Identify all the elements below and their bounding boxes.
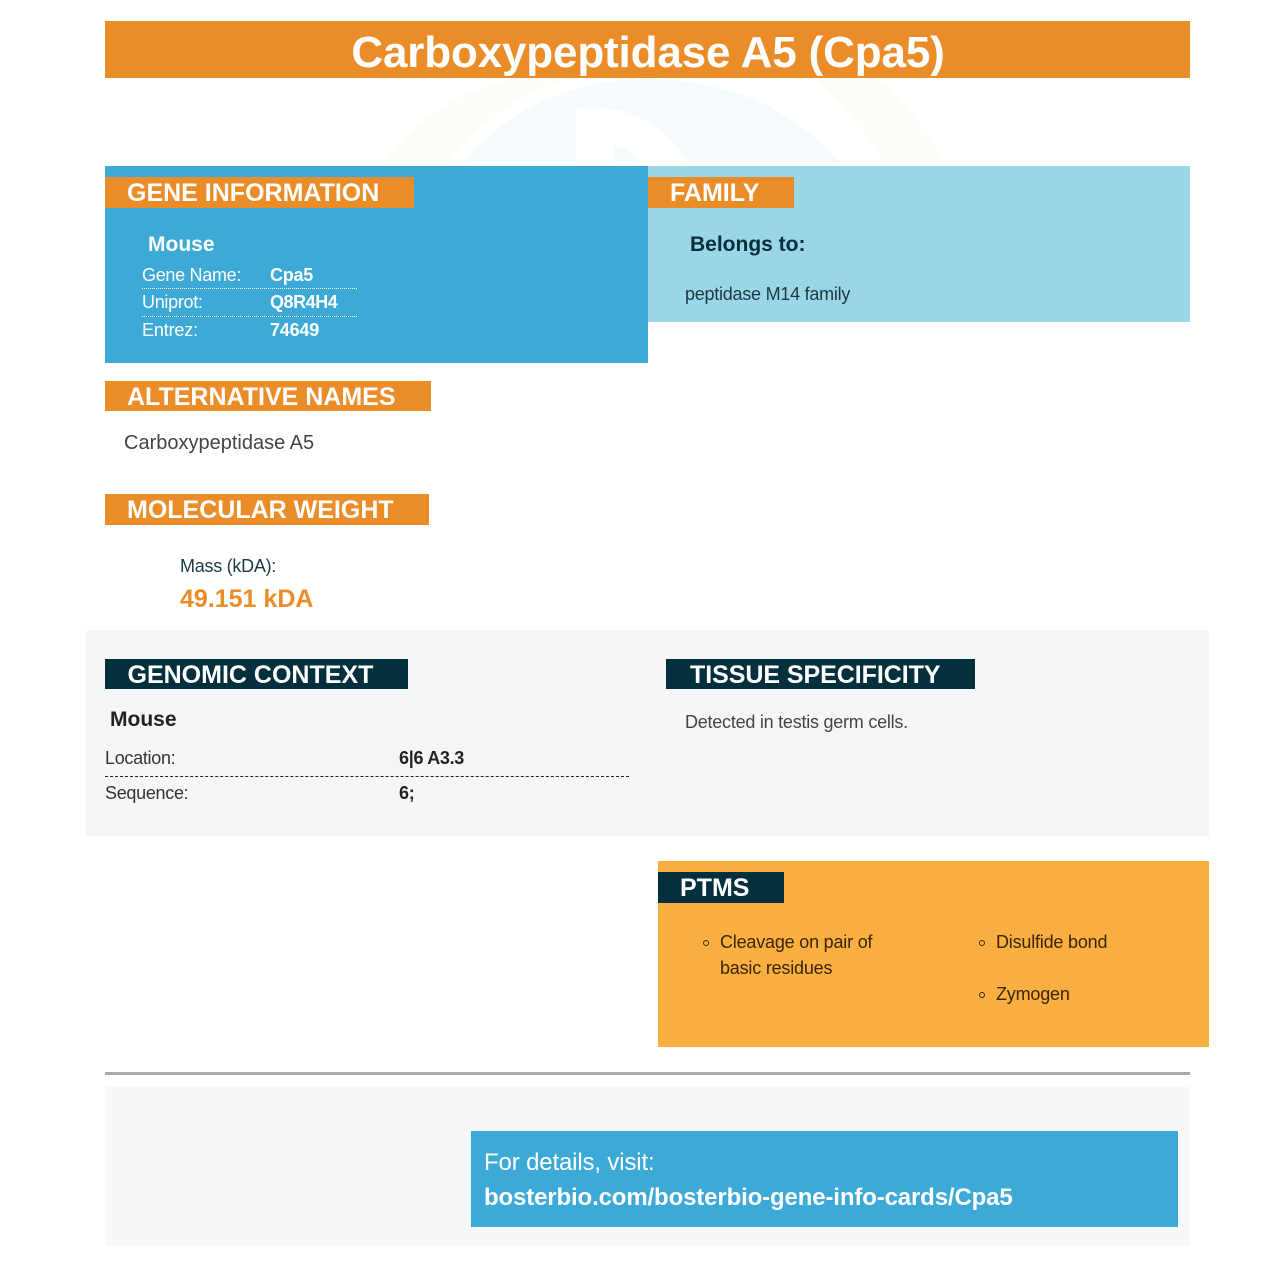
entrez row: [142, 320, 319, 340]
alternative name text: Carboxypeptidase A5: [124, 432, 314, 454]
panel: gene information: [105, 166, 648, 363]
entrez row: 74649: [270, 320, 319, 340]
uniprot row: Uniprot:: [142, 292, 203, 312]
heading: genomic context: GENOMIC CONTEXT: [128, 661, 373, 689]
heading: tissue specificity: TISSUE SPECIFICITY: [690, 661, 941, 689]
mass value: 49.151 kDA: [180, 585, 313, 613]
location row: 6|6 A3.3: [399, 748, 464, 768]
heading: gene information: GENE INFORMATION: [127, 179, 379, 207]
panel: alternative names: [105, 381, 431, 454]
panel: family: [648, 166, 1190, 322]
gene name row: Cpa5: [270, 265, 313, 285]
uniprot row: [142, 289, 357, 317]
ptm item: zymogen: Zymogen: [996, 984, 1070, 1004]
gene name row: Gene Name:: [142, 265, 241, 285]
heading: ptms: PTMS: [680, 874, 749, 902]
uniprot row: Q8R4H4: [270, 292, 337, 312]
species label: Mouse: [110, 708, 177, 731]
panel: footer: [105, 1087, 1190, 1246]
sequence row: 6;: [399, 783, 414, 803]
location row: Location:: [105, 748, 175, 768]
heading: ptms: [658, 872, 784, 903]
heading: alternative names: ALTERNATIVE NAMES: [127, 383, 396, 411]
title text: Carboxypeptidase A5 (Cpa5): [351, 28, 945, 77]
species label: Mouse: [148, 233, 215, 256]
location row: [105, 742, 629, 777]
callout: details link: [471, 1131, 1178, 1227]
ptm item: cleavage: basic residues: [720, 958, 832, 978]
panel: molecular weight: [105, 494, 429, 613]
heading: family: [648, 177, 794, 208]
tissue specificity text: Detected in testis germ cells.: [685, 712, 908, 732]
panel: ptms: [658, 861, 1209, 1047]
title banner: [105, 21, 1190, 78]
entrez row: Entrez:: [142, 320, 198, 340]
callout label: For details, visit:: [484, 1149, 655, 1176]
panel: grey band: [86, 630, 1209, 836]
callout url: bosterbio.com/bosterbio-gene-info-cards/Cpa5: [484, 1184, 1013, 1211]
ptm item: disulfide bond: Disulfide bond: [996, 932, 1107, 952]
gene name row: [142, 262, 357, 289]
ptm item: cleavage: Cleavage on pair of: [720, 932, 872, 952]
heading: family: FAMILY: [670, 179, 759, 207]
background watermark logo: [384, 78, 944, 162]
heading: molecular weight: MOLECULAR WEIGHT: [127, 496, 394, 524]
sequence row: [105, 783, 414, 803]
family value: peptidase M14 family: [685, 284, 850, 304]
belongs to label: Belongs to:: [690, 233, 806, 256]
ptm item: cleavage: [703, 932, 873, 978]
mass label: Mass (kDA):: [180, 556, 276, 576]
sequence row: Sequence:: [105, 783, 188, 803]
